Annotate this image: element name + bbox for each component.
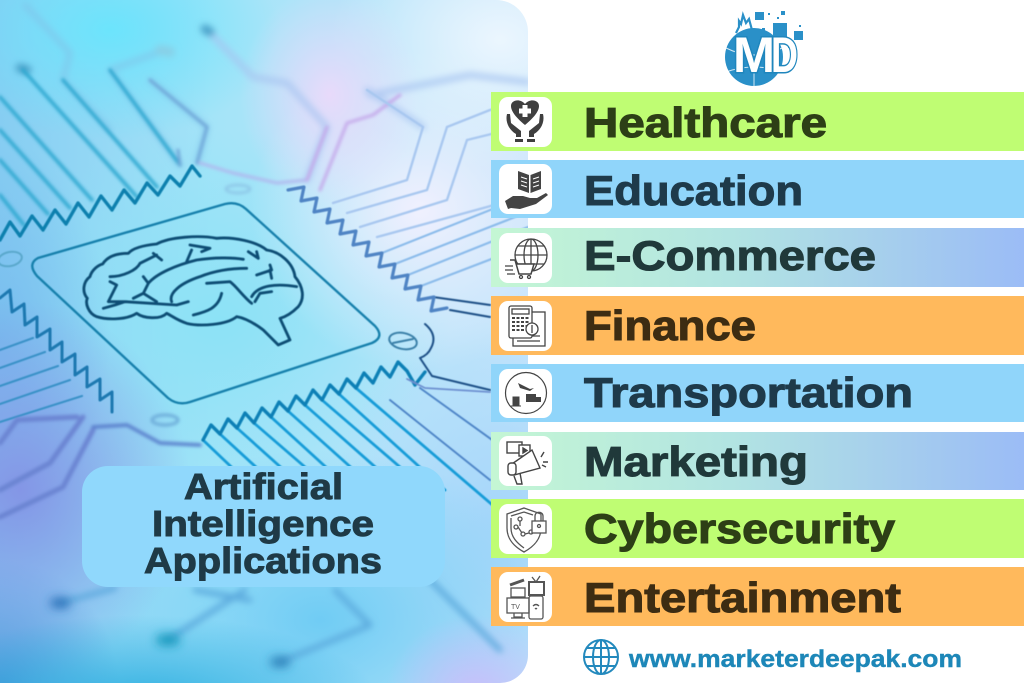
footer: website with globe icon [583,639,962,675]
brain [84,237,302,345]
chip and brain [0,203,418,403]
label: Artificial Intelligence Applications [82,466,445,587]
circuit traces: lower left [0,290,112,422]
circuit traces: upper right [288,90,528,390]
bar: Marketing: Marketing [584,438,808,485]
logo: MD globe [725,11,803,86]
circuit traces: lower right [203,362,520,520]
blurred bottom traces [60,580,500,662]
bar: Cybersecurity [491,499,1024,558]
bar: Education [491,160,1024,218]
bar: Finance: Finance [584,302,756,349]
panel: circuit board background [0,0,528,683]
bar: Education: Education [584,167,803,214]
chip mount holes [0,250,418,352]
bar: Entertainment: TV [511,604,520,611]
chip outline [32,203,379,403]
bar: Finance [491,296,1024,355]
bar: Transportation [491,364,1024,422]
bar: Healthcare [491,92,1024,151]
label: Artificial Intelligence Applications: Applications [144,540,382,581]
logo letters: M [733,27,775,83]
website url: www.marketerdeepak.com [628,646,962,673]
bar: Marketing [491,432,1024,490]
bar: Healthcare: Healthcare [584,99,827,146]
bar: Cybersecurity: Cybersecurity [584,505,896,552]
icon: globe [584,640,618,674]
bar: Transportation: Transportation [584,369,913,416]
label: Artificial Intelligence Applications: Intelligence [152,503,374,544]
logo: MD globe: D [771,27,798,83]
circuit traces: upper left zigzag pins [0,166,200,240]
bar: Entertainment: Entertainment [584,574,901,621]
bar: E-Commerce [491,228,1024,287]
label: Artificial Intelligence Applications: Artificial [184,466,343,507]
blurred far traces: upper left [20,5,528,180]
circuit traces: upper left [0,70,400,225]
bar: E-Commerce: E-Commerce [584,232,876,279]
bar: Entertainment [491,567,1024,626]
